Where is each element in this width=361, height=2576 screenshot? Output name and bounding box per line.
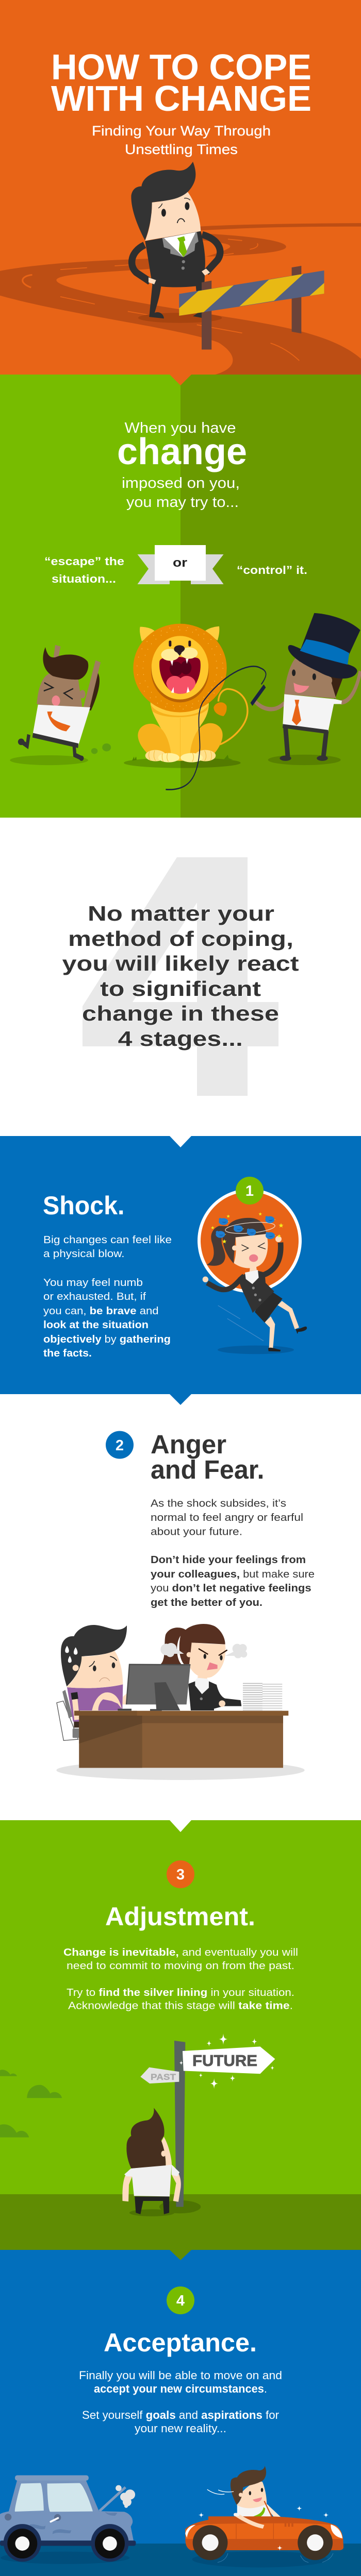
text: shock body: look at the situation [43,1319,149,1331]
badge: 3: 3 [176,1867,185,1883]
subtitle: Unsettling Times [125,142,238,157]
text: anger body [151,1497,315,1608]
text: shock body: objectively by gathering [43,1334,171,1345]
heading: no matter your method: to significant [100,977,261,1001]
panel: header background [0,0,361,375]
heading: acceptance: Acceptance. [104,2328,257,2357]
text: anger body: you don’t let negative feelings [151,1582,311,1594]
text: escape: situation... [52,572,116,585]
intro text [117,420,247,511]
illustration: man in sports car [185,2466,343,2567]
subtitle [92,123,271,157]
illustration: man running away [10,645,111,765]
text: adjustment body: Try to find the silver lining in your situation. [67,1987,294,1998]
illustration: worried man at barrier [131,162,222,323]
intro text: you may try to... [126,494,239,511]
illustration: man from behind [122,2108,181,2216]
illustration: dizzy woman [198,1189,307,1354]
illustration: signpost [140,2033,275,2213]
heading: shock: Shock. [43,1191,125,1220]
text: shock body: you can, be brave and [43,1306,159,1317]
ribbon: or [137,545,224,584]
panel: stage 4 acceptance [0,2250,361,2576]
big grey 4 [83,857,278,1096]
text: adjustment body: Change is inevitable, and eventually you will [63,1947,298,1958]
text: acceptance body [79,2369,282,2435]
text: shock body: the facts. [43,1348,92,1359]
illustration: signpost: PAST [151,2072,176,2082]
illustration: road barrier [179,266,324,350]
panel: stage 3 adjustment [0,1820,361,2250]
intro text: change [117,431,247,472]
text: adjustment body [63,1947,298,2011]
text: shock body [43,1234,172,1359]
heading: anger and fear: and Fear. [151,1455,264,1484]
title [51,47,311,118]
badge: 3 [167,1860,194,1888]
intro text: imposed on you, [122,475,240,492]
heading: anger and fear: Anger [151,1430,226,1459]
heading: no matter your method: 4 stages... [118,1027,243,1050]
title: HOW TO COPE [51,47,311,87]
illustration: man with top hat and whip [253,613,360,765]
text: control: “control” it. [237,564,307,577]
illustration: colleagues at desk [56,1624,305,1780]
panel: stage 1 shock [0,1136,361,1394]
text: shock body: a physical blow. [43,1248,125,1260]
text: anger body: Don’t hide your feelings from [151,1554,306,1566]
heading: no matter your method: change in these [82,1002,279,1025]
text: escape: “escape” the [44,555,124,568]
heading: no matter your method: you will likely react [62,952,299,975]
heading: anger and fear [151,1430,264,1484]
text: anger body: As the shock subsides, it’s [151,1497,286,1510]
panel: stage 2 anger and fear [0,1394,361,1820]
illustration: winding road [0,223,361,375]
badge: 1 [236,1177,264,1205]
illustration: lion [124,624,248,768]
badge: 2 [106,1431,134,1459]
badge: 2: 2 [116,1437,124,1454]
heading: adjustment: Adjustment. [105,1902,255,1931]
text: anger body: normal to feel angry or fearful [151,1512,303,1523]
badge: 1: 1 [245,1183,254,1199]
text: anger body: your colleagues, but make sure [151,1568,315,1580]
text: acceptance body: Finally you will be able to move on and [79,2369,282,2382]
title: WITH CHANGE [51,78,311,118]
text: escape [44,555,124,585]
ribbon: or: or [173,556,187,570]
text: anger body: about your future. [151,1526,242,1537]
illustration: signpost: FUTURE [192,2052,257,2070]
badge: 4: 4 [176,2293,185,2309]
text: acceptance body: accept your new circumstances. [94,2382,267,2395]
illustration: broken-down car [0,2475,136,2564]
subtitle: Finding Your Way Through [92,123,271,139]
illustration: clouds [0,2070,62,2138]
heading: no matter your method [62,902,299,1050]
text: acceptance body: Set yourself goals and aspirations for [82,2409,279,2421]
badge: 4 [167,2286,194,2314]
text: acceptance body: your new reality... [135,2422,226,2435]
heading: no matter your method: No matter your [88,902,274,925]
intro text: When you have [125,420,236,436]
text: shock body: You may feel numb [43,1277,143,1289]
panel: green split section [0,375,361,818]
illustration: whip [166,666,266,790]
heading: no matter your method: method of coping, [68,927,293,951]
text: shock body: or exhausted. But, if [43,1291,146,1302]
text: shock body: Big changes can feel like [43,1234,172,1246]
text: anger body: get the better of you. [151,1597,262,1608]
text: adjustment body: Acknowledge that this stage will take time . [68,2000,293,2011]
text: adjustment body: need to commit to moving on from the past. [67,1960,294,1972]
